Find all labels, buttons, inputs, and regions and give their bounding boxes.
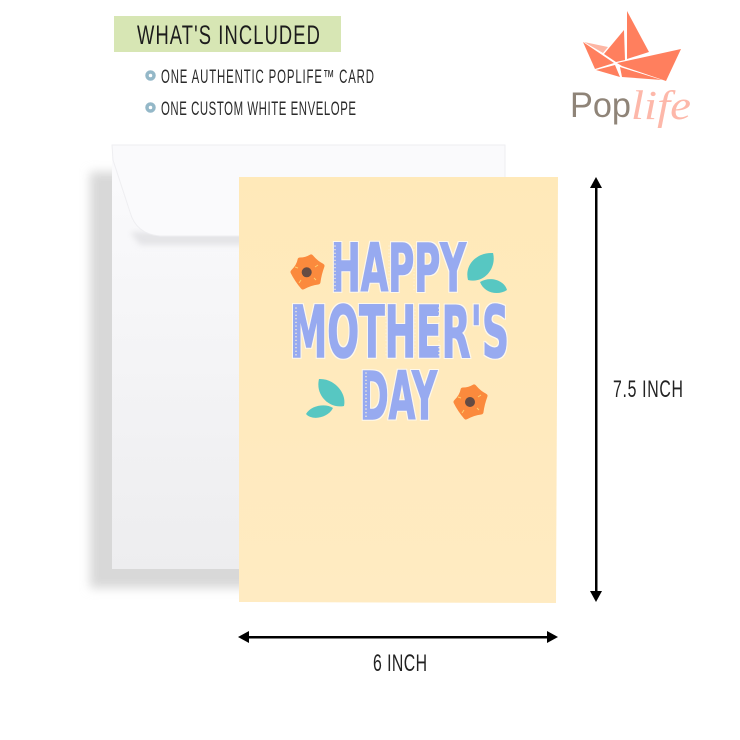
- greeting: happy mother's day: DAY: [360, 358, 438, 435]
- greeting: happy mother's day: [290, 230, 509, 435]
- leaves: bottom left: [306, 379, 344, 418]
- arrow: width: [238, 631, 558, 643]
- wordmark: life: life: [631, 82, 691, 128]
- card: [239, 177, 558, 603]
- label: height: 7.5 INCH: [613, 377, 683, 403]
- lettering dots: [296, 246, 439, 418]
- item: envelope: ONE CUSTOM WHITE ENVELOPE: [161, 99, 356, 120]
- icon: paper boat: [583, 11, 681, 81]
- heading: what's included: WHAT'S INCLUDED: [137, 19, 320, 50]
- item: card: ONE AUTHENTIC POPLIFE™ CARD: [161, 67, 374, 88]
- greeting: happy mother's day: HAPPY: [331, 230, 467, 307]
- envelope flap shadow: [130, 232, 505, 245]
- leaves: top right: [467, 253, 507, 293]
- flower: top left: [293, 257, 322, 287]
- arrow: height: [590, 177, 602, 602]
- envelope shadow: [90, 172, 250, 588]
- flower: bottom right: [456, 387, 485, 417]
- wordmark: pop: Pop: [570, 86, 631, 125]
- list: included items: [147, 67, 374, 120]
- greeting: happy mother's day: MOTHER'S: [290, 291, 509, 374]
- envelope: [112, 145, 505, 569]
- envelope flap: [112, 145, 505, 236]
- label: width: 6 INCH: [373, 651, 427, 677]
- logo: poplife: [570, 11, 691, 128]
- heading: what's included: [114, 16, 341, 52]
